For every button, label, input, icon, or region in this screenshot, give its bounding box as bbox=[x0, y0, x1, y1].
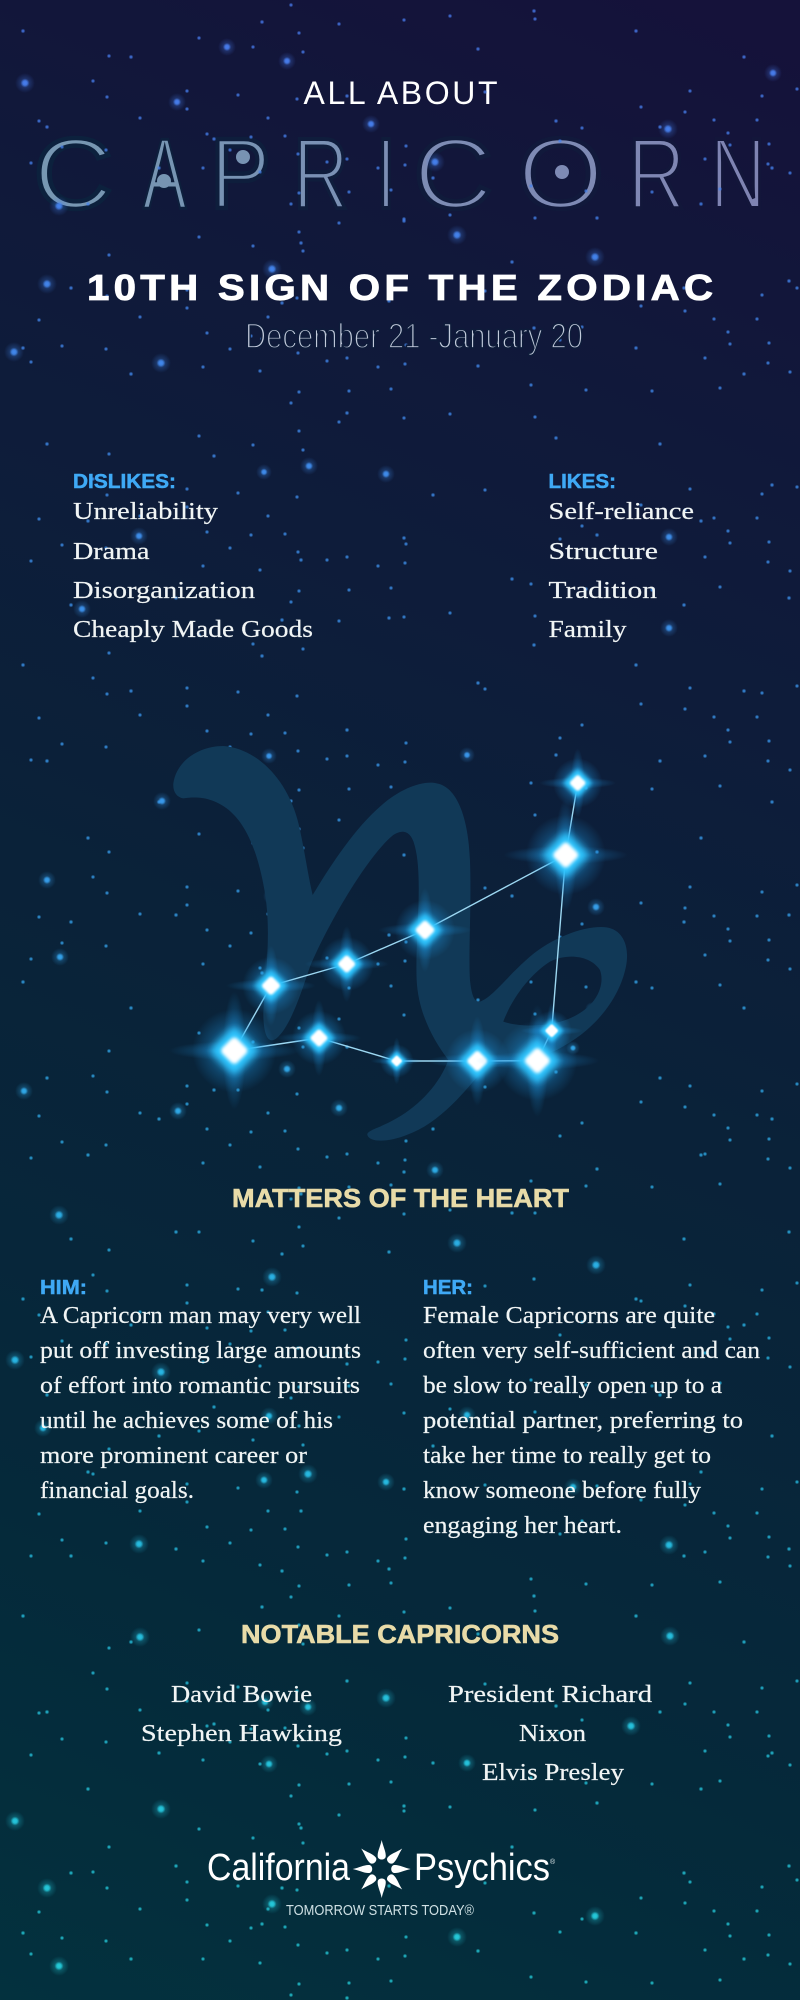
heading: notable capricorns: NOTABLE CAPRICORNS bbox=[241, 1619, 559, 1649]
title: Capricorn: I bbox=[376, 119, 396, 230]
constellation lines bbox=[234, 783, 578, 1061]
list: notable names left: Stephen Hawking bbox=[141, 1720, 342, 1747]
text block: her: take her time to really get to bbox=[423, 1442, 711, 1469]
title: Capricorn: C bbox=[414, 119, 493, 230]
list: likes items: Structure bbox=[548, 538, 658, 565]
text block: him: financial goals. bbox=[40, 1477, 194, 1504]
title: Capricorn: R bbox=[293, 117, 349, 229]
list: notable names left bbox=[141, 1681, 342, 1747]
title: Capricorn: N bbox=[710, 119, 766, 230]
text block: her: often very self-sufficient and can bbox=[423, 1337, 760, 1364]
list: dislikes items: Drama bbox=[73, 538, 150, 565]
icon: starburst bbox=[353, 1840, 411, 1898]
list: dislikes items: Cheaply Made Goods bbox=[73, 616, 313, 643]
list: dislikes items: Disorganization bbox=[73, 577, 255, 604]
heading: 10th sign of the zodiac: 10TH SIGN OF THE ZODIAC bbox=[87, 268, 713, 308]
illustration: capricorn symbol and constellation bbox=[169, 746, 628, 1141]
tagline: TOMORROW STARTS TODAY® bbox=[286, 1902, 474, 1919]
text block: him: A Capricorn man may very well bbox=[40, 1302, 361, 1329]
text block: her: Female Capricorns are quite bbox=[423, 1302, 715, 1329]
text block: her bbox=[423, 1302, 760, 1539]
title: Capricorn: A bbox=[143, 118, 187, 229]
text block: her: engaging her heart. bbox=[423, 1512, 622, 1539]
heading: dislikes: DISLIKES: bbox=[73, 471, 176, 493]
text block: him: put off investing large amounts bbox=[40, 1337, 361, 1364]
list: likes items: Family bbox=[548, 616, 627, 643]
heading: him: HIM: bbox=[40, 1277, 87, 1299]
wordmark right: Psychics bbox=[414, 1847, 550, 1889]
heading: likes: LIKES: bbox=[548, 471, 616, 493]
title: Capricorn: O bbox=[518, 118, 604, 230]
list: notable names left: David Bowie bbox=[171, 1681, 312, 1708]
heading: matters of the heart: MATTERS OF THE HEART bbox=[232, 1183, 569, 1213]
list: notable names right: President Richard bbox=[448, 1681, 652, 1708]
text block: him: of effort into romantic pursuits bbox=[40, 1372, 360, 1399]
constellation stars bbox=[169, 748, 628, 1117]
list: dislikes items: Unreliability bbox=[73, 498, 219, 525]
list: notable names right: Nixon bbox=[519, 1720, 586, 1747]
panel: likes bbox=[548, 471, 694, 643]
title: Capricorn: P bbox=[210, 118, 271, 230]
panel: dislikes bbox=[73, 471, 313, 643]
panel: him bbox=[40, 1277, 361, 1504]
text block: him: more prominent career or bbox=[40, 1442, 307, 1469]
text block: him bbox=[40, 1302, 361, 1504]
registered mark: ® bbox=[550, 1858, 556, 1866]
date range: December 21 -January 20 bbox=[245, 317, 583, 356]
heading: all about: ALL ABOUT bbox=[304, 75, 498, 111]
text block: her: potential partner, preferring to bbox=[423, 1407, 743, 1434]
title: Capricorn: C bbox=[34, 119, 113, 230]
text block: him: until he achieves some of his bbox=[40, 1407, 333, 1434]
list: likes items: Self-reliance bbox=[548, 498, 694, 525]
heading: her: HER: bbox=[423, 1277, 473, 1299]
wordmark left: California bbox=[207, 1847, 351, 1889]
list: likes items: Tradition bbox=[548, 577, 657, 604]
text block: her: be slow to really open up to a bbox=[423, 1372, 722, 1399]
panel: her bbox=[423, 1277, 760, 1539]
text block: her: know someone before fully bbox=[423, 1477, 702, 1504]
list: notable names right bbox=[448, 1681, 652, 1786]
title: Capricorn bbox=[34, 117, 766, 230]
list: likes items bbox=[548, 498, 694, 643]
logo: California Psychics bbox=[207, 1840, 556, 1919]
capricorn glyph shape bbox=[173, 746, 627, 1141]
list: notable names right: Elvis Presley bbox=[482, 1759, 625, 1786]
title: Capricorn: R bbox=[628, 119, 685, 230]
list: dislikes items bbox=[73, 498, 313, 643]
